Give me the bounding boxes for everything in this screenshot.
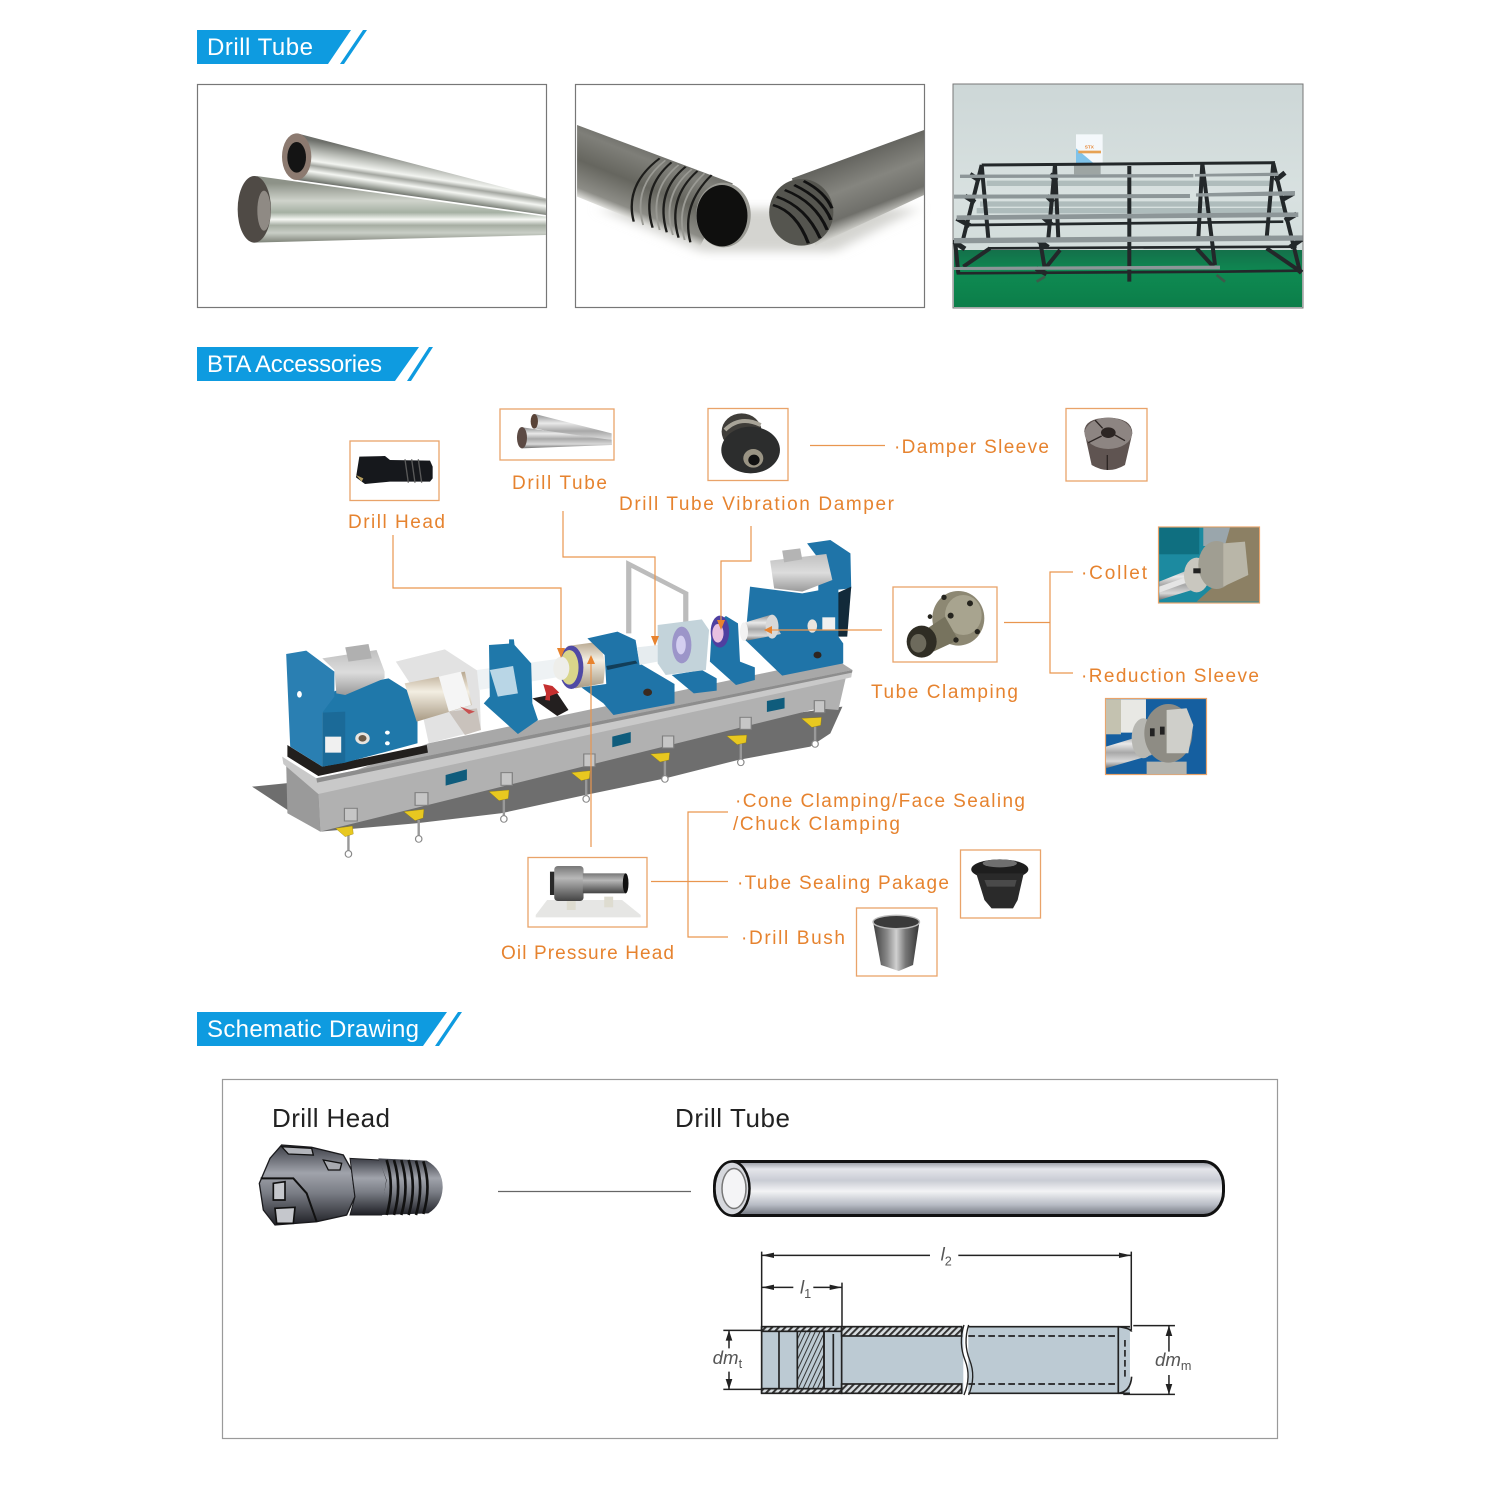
shelf shadows bbox=[977, 183, 1283, 211]
technical drawing: drill tube dimensions bbox=[713, 1244, 1191, 1395]
first steady rest bbox=[484, 639, 538, 734]
tube section bbox=[762, 1327, 1132, 1393]
callout: Drill Tube Vibration Damper thumbnail bbox=[708, 408, 788, 480]
label: Cone Clamping, Face Sealing, Chuck Clamping bbox=[733, 791, 1025, 835]
section heading: Drill Tube bbox=[197, 30, 367, 64]
label: Cone Clamping, Face Sealing, Chuck Clamping: ·Cone Clamping/Face Sealing bbox=[735, 791, 1025, 812]
label: Drill Tube Vibration Damper: Drill Tube Vibration Damper bbox=[619, 494, 895, 515]
display card on rack bbox=[1074, 134, 1103, 174]
access windows bbox=[446, 698, 785, 786]
bed bbox=[282, 658, 852, 832]
dimension labels: 1 bbox=[804, 1287, 811, 1301]
dimension labels: dm bbox=[1155, 1349, 1181, 1370]
label: Drill Head: Drill Head bbox=[348, 512, 445, 533]
transparent tube between stands bbox=[637, 645, 658, 665]
callout: Damper Sleeve thumbnail bbox=[1066, 408, 1147, 481]
callout: Drill Tube thumbnail bbox=[500, 409, 614, 460]
callout: Tube Clamping thumbnail bbox=[893, 587, 997, 662]
label: Drill Bush: ·Drill Bush bbox=[741, 928, 845, 949]
brackets bbox=[344, 701, 825, 821]
transparent tube bbox=[477, 658, 561, 690]
callout: Drill Bush thumbnail bbox=[856, 908, 937, 976]
dimension lines bbox=[723, 1252, 1175, 1394]
right headstock bbox=[740, 540, 851, 676]
section heading: BTA Accessories: BTA Accessories bbox=[207, 351, 382, 378]
label: Drill Tube: Drill Tube bbox=[675, 1103, 790, 1133]
left headstock bbox=[286, 644, 418, 767]
label: Cone Clamping, Face Sealing, Chuck Clamping: /Chuck Clamping bbox=[733, 814, 900, 835]
black base plate bbox=[287, 745, 428, 776]
panel: threaded drill tube ends render bbox=[576, 84, 924, 308]
dimension labels: 2 bbox=[945, 1254, 952, 1268]
dimension labels: dm bbox=[713, 1347, 739, 1368]
callout leaders and arrows bbox=[393, 446, 1073, 937]
label: Reduction Sleeve: ·Reduction Sleeve bbox=[1081, 666, 1259, 687]
dimension labels bbox=[713, 1244, 1191, 1373]
illustration: deep hole drilling machine bbox=[252, 540, 852, 857]
shadow bbox=[252, 707, 842, 832]
illustration: drill head bbox=[259, 1145, 443, 1225]
coolant pipe bbox=[629, 564, 686, 633]
connector line bbox=[498, 1190, 691, 1192]
photo: Reduction Sleeve bbox=[1106, 698, 1206, 774]
dimension labels: t bbox=[739, 1357, 743, 1371]
red clamp on black plate bbox=[532, 684, 569, 716]
panel: drill tube rack photo bbox=[953, 84, 1303, 308]
glass housing and vibration damper bbox=[658, 616, 755, 693]
label: Damper Sleeve: ·Damper Sleeve bbox=[894, 437, 1049, 458]
label: Collet: ·Collet bbox=[1081, 563, 1148, 584]
dimension labels: l bbox=[800, 1276, 804, 1297]
panel: polished drill tubes photo bbox=[198, 84, 546, 308]
transparent guard and chuck bbox=[396, 649, 481, 743]
display card on rack: STX bbox=[1085, 145, 1095, 150]
section heading: Schematic Drawing: Schematic Drawing bbox=[207, 1016, 419, 1043]
callout: Drill Head thumbnail bbox=[350, 441, 439, 500]
label: Tube Clamping: Tube Clamping bbox=[871, 682, 1018, 703]
illustration: drill tube bbox=[714, 1162, 1224, 1216]
section heading: BTA Accessories bbox=[197, 347, 433, 381]
section heading: Drill Tube: Drill Tube bbox=[207, 34, 313, 61]
label: Oil Pressure Head: Oil Pressure Head bbox=[501, 943, 674, 964]
photo: Collet bbox=[1158, 527, 1260, 603]
panel: schematic drawing frame bbox=[222, 1080, 1278, 1438]
dimension labels: m bbox=[1181, 1359, 1191, 1373]
soft shadow under tubes bbox=[598, 208, 919, 252]
label: Drill Tube: Drill Tube bbox=[512, 473, 607, 494]
oil pressure head on machine bbox=[553, 632, 675, 715]
label: Tube Sealing Pakage: ·Tube Sealing Pakage bbox=[737, 873, 949, 894]
label: Drill Head: Drill Head bbox=[272, 1103, 390, 1133]
section heading: Schematic Drawing bbox=[197, 1012, 462, 1046]
levelling feet bbox=[336, 717, 822, 857]
dimension labels: l bbox=[941, 1244, 945, 1265]
callout: Tube Sealing Package thumbnail bbox=[960, 850, 1040, 918]
callout: Oil Pressure Head thumbnail bbox=[528, 858, 647, 927]
